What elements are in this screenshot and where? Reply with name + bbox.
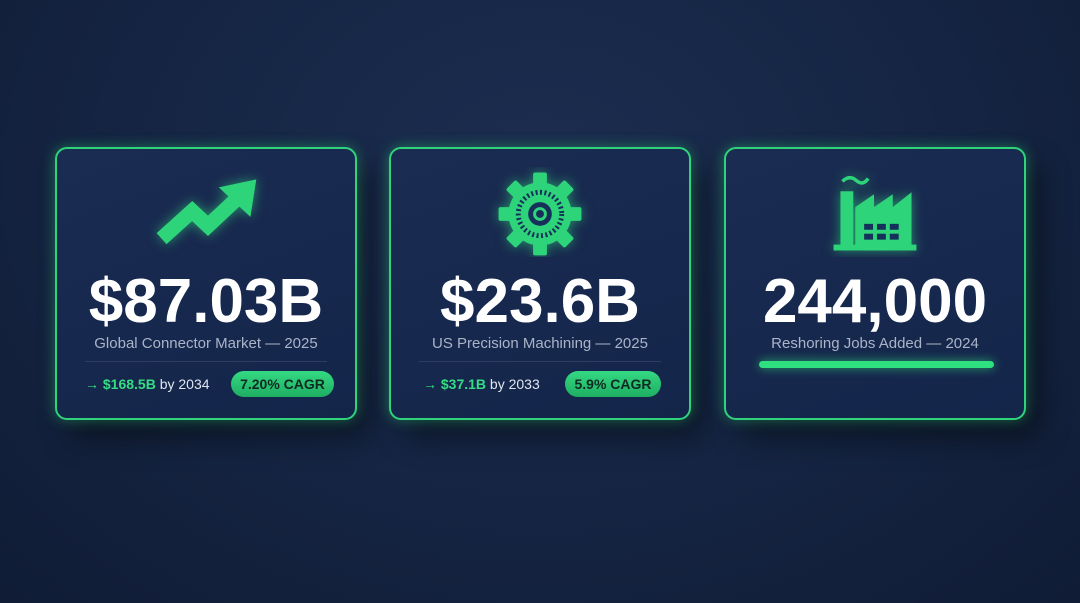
- subtitle: Reshoring Jobs Added — 2024: [771, 335, 979, 352]
- badge: CAGR: 7.20% CAGR: [240, 376, 325, 392]
- forecast: → $37.1B by 2033: [423, 376, 540, 392]
- subtitle: Global Connector Market — 2025: [94, 335, 318, 352]
- icon: gear: [492, 167, 588, 257]
- big number: 244,000: [763, 267, 987, 336]
- badge: CAGR: 5.9% CAGR: [574, 376, 652, 392]
- card: reshoring jobs: [724, 147, 1026, 420]
- forecast: → $168.5B by 2034: [85, 376, 210, 392]
- subtitle: US Precision Machining — 2025: [432, 335, 648, 352]
- badge: CAGR: [565, 371, 661, 397]
- icon: factory: [829, 170, 922, 257]
- big number: $87.03B: [89, 267, 323, 336]
- progress bar: [759, 361, 994, 368]
- big number: $23.6B: [440, 267, 640, 336]
- icon: trending arrow: [152, 174, 262, 248]
- card: connector market: [55, 147, 357, 420]
- card: precision machining: [389, 147, 691, 420]
- badge: CAGR: [231, 371, 334, 397]
